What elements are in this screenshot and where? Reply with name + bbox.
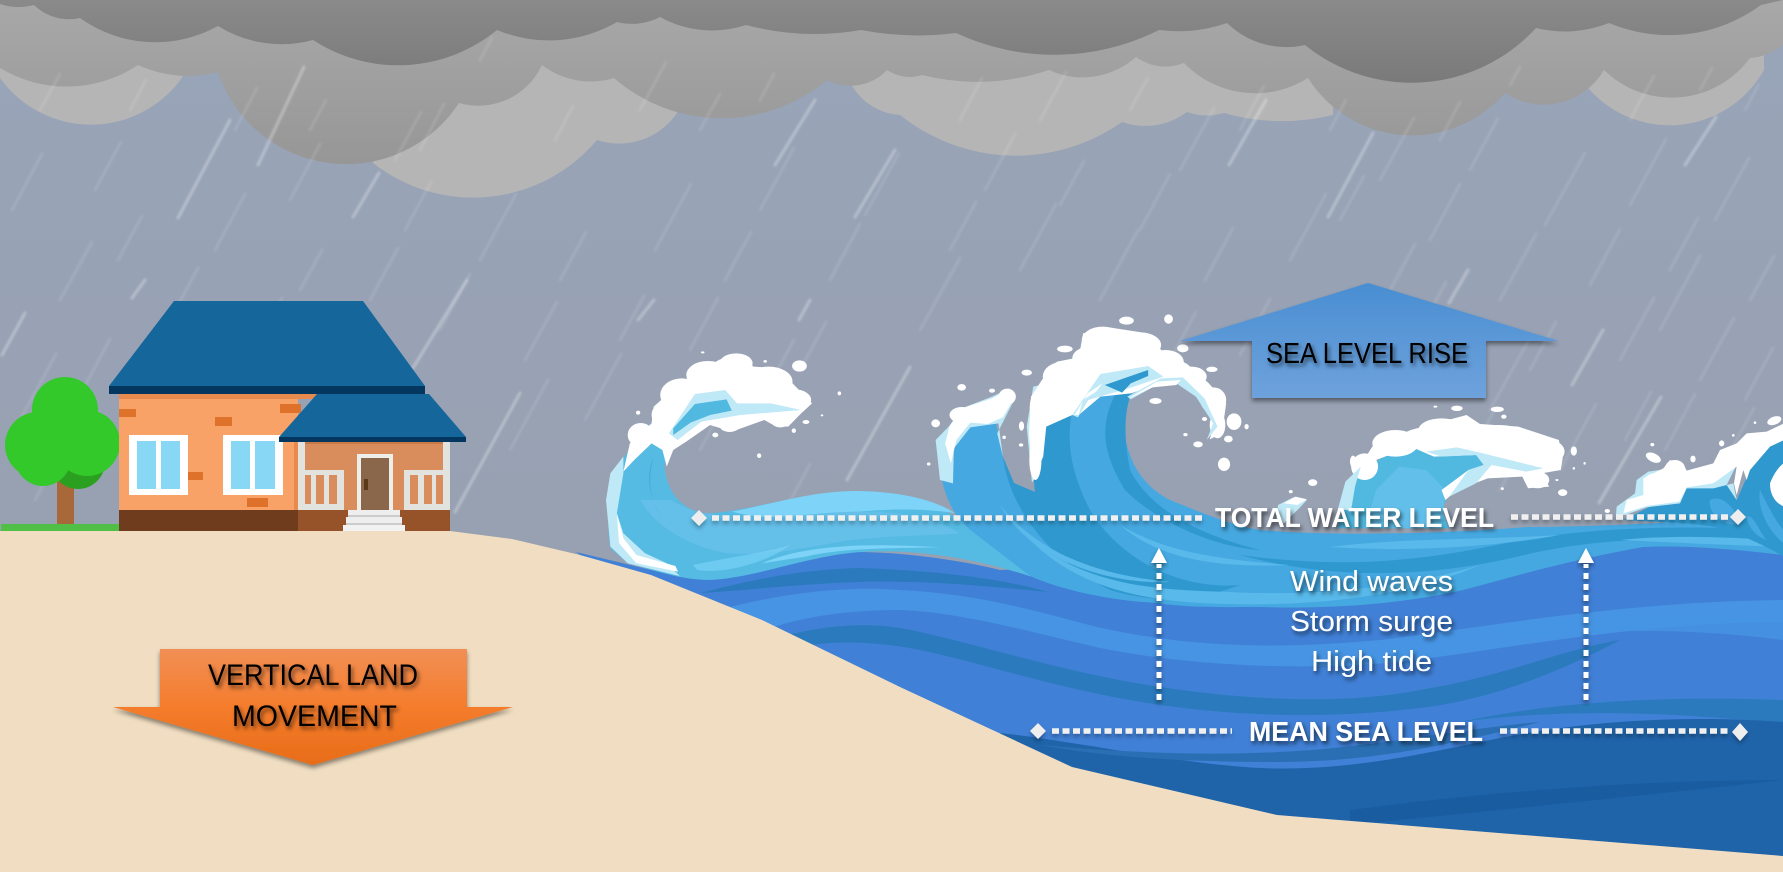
- wave 2 and water surface body: [942, 372, 1783, 608]
- mean sea level label: MEAN SEA LEVEL: [1249, 716, 1483, 747]
- porch wall: [294, 442, 450, 510]
- steps: [343, 510, 405, 531]
- wave 1 white rim: [617, 513, 678, 572]
- wave 3 white foam cap: [1345, 415, 1565, 500]
- wave 1 body: [608, 390, 1031, 580]
- vertical land movement label: VERTICAL LAND: [208, 659, 418, 692]
- main wall: [119, 394, 298, 510]
- wave 1 crest highlight: [732, 491, 955, 517]
- wave 3 light foam: [1426, 447, 1543, 497]
- wind waves: Wind waves: [1290, 566, 1453, 598]
- water level components: [1290, 566, 1453, 678]
- wave 4 white foam: [1623, 423, 1783, 513]
- total water level label: TOTAL WATER LEVEL: [1215, 502, 1494, 533]
- arrow: sea level rise: [1180, 283, 1559, 398]
- bricks: [119, 404, 301, 507]
- tree: [1, 377, 120, 531]
- wave 3 spray droplets: [1289, 406, 1586, 496]
- deep sea body: [576, 540, 1783, 870]
- right vertical dotted arrow: [1578, 548, 1594, 700]
- main crest light foam: [1027, 383, 1048, 483]
- total water level line: [691, 509, 1746, 526]
- foundation: [119, 510, 298, 531]
- vertical land movement label: MOVEMENT: [232, 700, 397, 733]
- storm surge: Storm surge: [1290, 606, 1453, 638]
- middle window: [223, 435, 283, 495]
- left window: [129, 435, 188, 495]
- high tide: High tide: [1311, 646, 1432, 678]
- wave 1, far left curl: [606, 351, 1031, 580]
- wave 1 spray droplets: [636, 351, 841, 458]
- sea level rise label: SEA LEVEL RISE: [1266, 338, 1468, 370]
- wave 4 light foam: [1616, 465, 1737, 515]
- wave 1 inner light foam: [669, 390, 801, 440]
- wave 1 light foam strip: [606, 457, 680, 576]
- wave 2 spray droplets: [927, 314, 1249, 471]
- storm clouds: light and mid layers: [0, 0, 1783, 198]
- porch roof: [279, 394, 466, 442]
- left crest white foam: [945, 389, 1016, 463]
- rain streaks: [2, 38, 1774, 520]
- sand coastline: [0, 531, 1783, 872]
- main roof: [109, 301, 425, 394]
- left crest light foam: [936, 388, 1016, 483]
- house: [109, 301, 466, 531]
- wave 3 body: [1338, 447, 1484, 528]
- wave 4 spray droplets: [1605, 414, 1783, 513]
- door: [357, 454, 393, 510]
- wave 1 inner blue: [673, 399, 732, 435]
- wave 3, curling crest: [1276, 406, 1586, 528]
- main crest white foam: [1029, 327, 1226, 480]
- wave 4, far right crest: [1605, 414, 1783, 557]
- storm clouds: dark top layer: [0, 0, 1783, 83]
- mean sea level line: [1030, 723, 1748, 741]
- main crest blue pocket: [1105, 370, 1148, 393]
- porch posts and railings: [298, 442, 450, 510]
- main crest inner light foam: [1072, 366, 1218, 440]
- wave 1 white foam cap: [623, 353, 812, 472]
- arrow: vertical land movement: [113, 649, 513, 765]
- wave 2, double crest foam: [927, 314, 1249, 483]
- small splash behind label: [1276, 497, 1307, 523]
- left vertical dotted arrow: [1151, 548, 1167, 700]
- wave 4 body: [1623, 440, 1783, 557]
